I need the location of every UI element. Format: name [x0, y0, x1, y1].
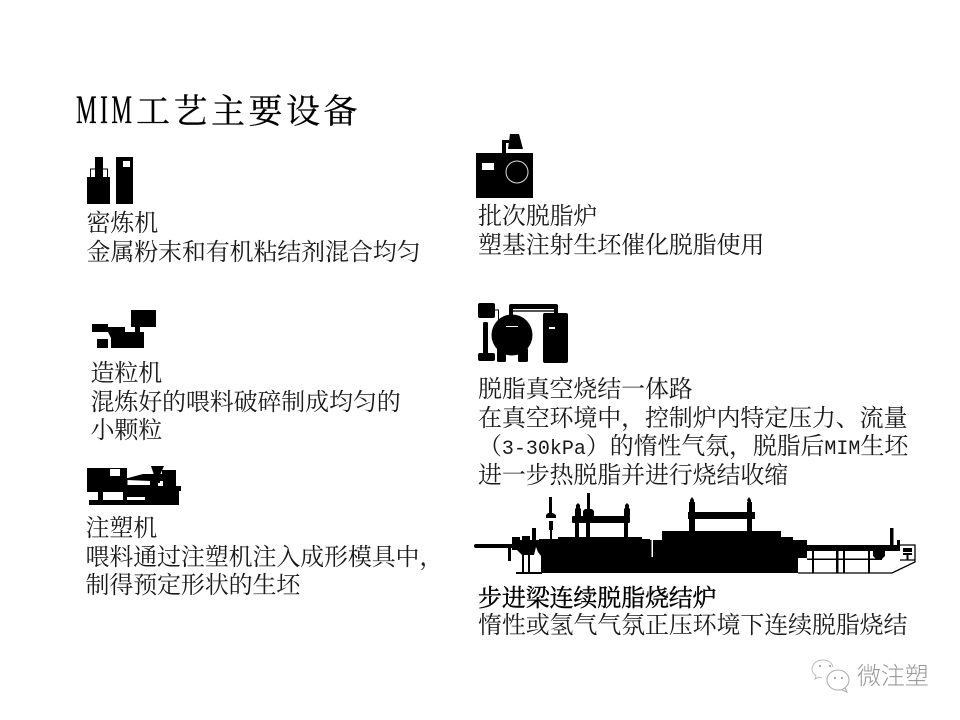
text: injection molding machine: 喂料通过注塑机注入成形模具中， — [86, 545, 443, 571]
text: vacuum debinding and sintering furnace: （3-30kPa）的惰性气氛，脱脂后MIM生坯 — [478, 434, 908, 461]
text: vacuum debinding and sintering furnace: 脱脂真空烧结一体路 — [478, 377, 693, 403]
text: walking beam continuous furnace — [478, 585, 907, 639]
icon: internal mixer — [87, 157, 133, 204]
text: walking beam continuous furnace: 惰性或氢气气氛正压环境下连续脱脂烧结 — [478, 613, 907, 639]
icon: vacuum debinding and sintering furnace — [478, 303, 568, 363]
icon: chat bubbles — [812, 660, 850, 693]
title — [76, 87, 361, 132]
icon: injection molding machine — [87, 466, 181, 505]
text: granulator: 造粒机 — [90, 361, 162, 387]
watermark — [812, 660, 929, 693]
text: vacuum debinding and sintering furnace — [478, 376, 908, 489]
text: batch debinding furnace: 塑基注射生坯催化脱脂使用 — [478, 233, 764, 259]
title: 工艺主要设备 — [136, 94, 361, 131]
text: vacuum debinding and sintering furnace: 进一步热脱脂并进行烧结收缩 — [478, 463, 788, 489]
icon: granulator — [92, 310, 156, 348]
text: granulator — [90, 360, 401, 444]
icon: walking beam continuous furnace — [474, 493, 916, 574]
text: granulator: 混炼好的喂料破碎制成均匀的 — [90, 390, 401, 416]
text: batch debinding furnace — [478, 204, 764, 259]
text: internal mixer: 金属粉末和有机粘结剂混合均匀 — [86, 240, 420, 266]
text: walking beam continuous furnace: 步进梁连续脱脂烧结炉 — [478, 586, 716, 612]
text: injection molding machine: 注塑机 — [86, 516, 157, 542]
title: MIM — [76, 87, 135, 132]
text: internal mixer: 密炼机 — [86, 211, 158, 237]
text: granulator: 小颗粒 — [90, 418, 162, 444]
text: injection molding machine — [86, 516, 443, 599]
icon: batch debinding furnace — [476, 134, 533, 198]
text: vacuum debinding and sintering furnace: 在真空环境中，控制炉内特定压力、流量 — [478, 406, 907, 432]
text: injection molding machine: 制得预定形状的生坯 — [86, 573, 300, 599]
text: batch debinding furnace: 批次脱脂炉 — [478, 204, 597, 230]
text: internal mixer — [86, 210, 420, 266]
watermark text: 微注塑 — [857, 663, 929, 690]
